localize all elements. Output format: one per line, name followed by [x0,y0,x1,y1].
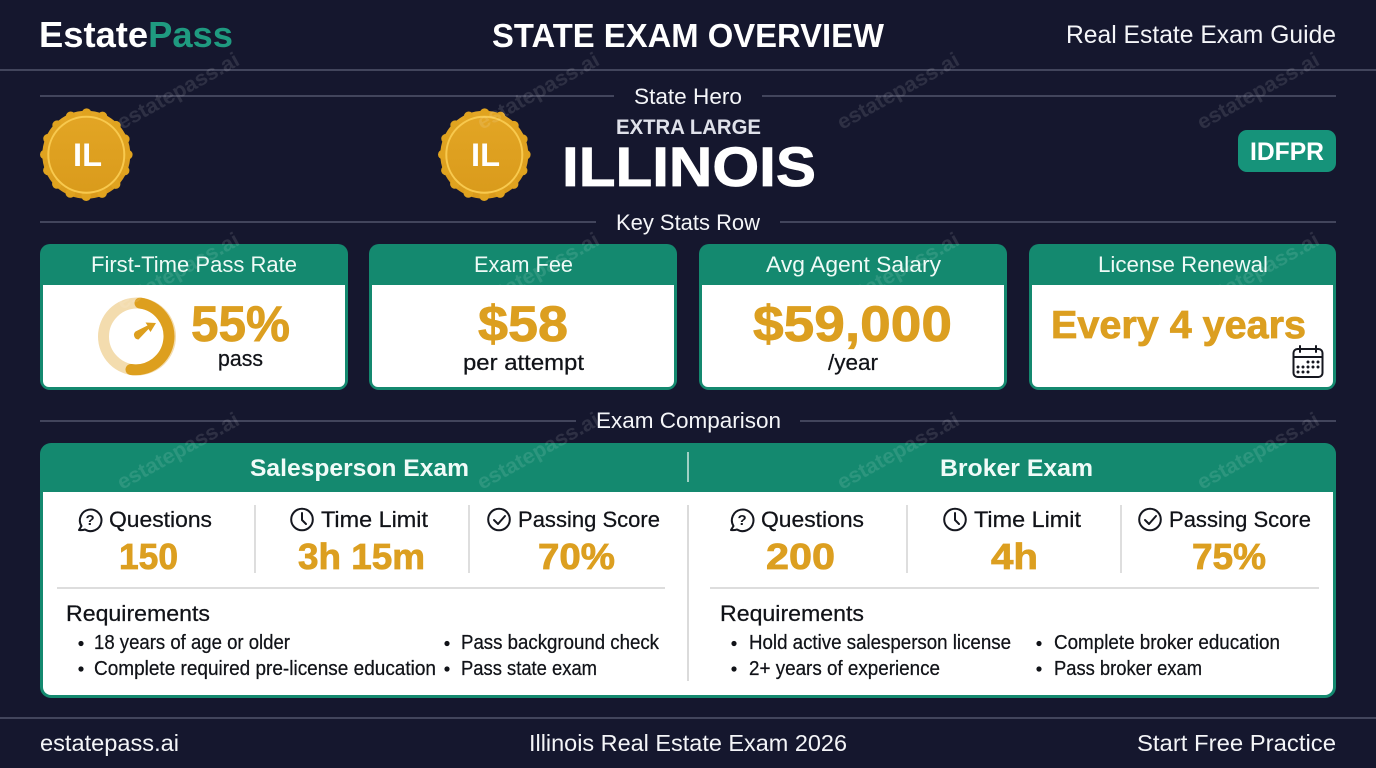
card: first-time pass rate [40,244,348,390]
section label: state hero: State Hero [634,84,742,109]
header tagline: Real Estate Exam Guide [1066,21,1336,49]
salesperson exam column: Salesperson Exam [250,455,469,482]
agency pill [1238,130,1336,172]
broker exam column [710,455,1319,680]
salesperson exam column: 70% [538,536,615,577]
watermarks: estatepass.ai [833,228,963,314]
agency pill: IDFPR [1250,138,1324,166]
state badge center: IL [471,137,500,173]
card: avg agent salary: Avg Agent Salary [766,252,941,277]
panel: exam comparison [40,443,1336,698]
salesperson exam column: Passing Score [518,507,660,532]
watermarks: estatepass.ai [473,48,603,134]
icon: question bubble: ? [738,512,747,529]
state badge left: IL [73,137,102,173]
title: STATE EXAM OVERVIEW [492,17,885,54]
watermarks: estatepass.ai [473,228,603,314]
broker exam column: Broker Exam [940,455,1093,482]
watermarks: estatepass.ai [113,408,243,494]
section label: exam comparison: Exam Comparison [596,408,781,433]
salesperson exam column: Questions [109,507,212,532]
icon: clock [944,509,966,530]
broker exam column: Requirements [720,601,864,626]
state badge left [42,111,130,199]
card: first-time pass rate: First-Time Pass Rate [91,252,297,277]
salesperson exam column: 3h 15m [298,536,425,577]
icon: question bubble [79,510,101,531]
state badge center [440,111,528,199]
size label: EXTRA LARGE [616,116,761,139]
card: license renewal: Every 4 years [1051,304,1306,347]
broker exam column: Questions [761,507,864,532]
footer: Illinois Real Estate Exam 2026 [529,730,847,756]
broker exam column: Time Limit [974,507,1081,532]
card: avg agent salary: /year [828,350,878,375]
section label: key stats: Key Stats Row [616,210,760,235]
broker exam column: 2+ years of experience [749,658,940,680]
card: avg agent salary: $59,000 [753,296,952,352]
broker exam column: 200 [766,536,835,577]
card: first-time pass rate: 55% [191,296,290,352]
broker exam column: 4h [991,536,1038,577]
footer [40,730,1336,756]
icon: check circle [488,509,510,530]
watermarks: estatepass.ai [833,48,963,134]
salesperson exam column [57,455,665,680]
state name: ILLINOIS [562,135,816,198]
watermarks: estatepass.ai [113,48,243,134]
logo: EstatePass [39,14,233,55]
salesperson exam column: 18 years of age or older [94,632,290,654]
card: exam fee [369,244,677,390]
icon: clock [291,509,313,530]
card: license renewal: License Renewal [1098,252,1268,277]
icon: check circle [1139,509,1161,530]
broker exam column: Passing Score [1169,507,1311,532]
icon: question bubble: ? [86,512,95,529]
salesperson exam column: Pass state exam [461,658,597,680]
salesperson exam column: Pass background check [461,632,660,654]
salesperson exam column: Requirements [66,601,210,626]
footer: Start Free Practice [1137,730,1336,756]
salesperson exam column: Time Limit [321,507,428,532]
card: exam fee: per attempt [463,350,584,375]
card: exam fee: $58 [478,296,568,352]
watermarks: estatepass.ai [473,408,603,494]
watermarks: estatepass.ai [113,228,243,314]
header bar [0,14,1376,70]
watermarks [113,48,1323,494]
icon: question bubble [731,510,753,531]
card: license renewal [1029,244,1336,390]
watermarks: estatepass.ai [1193,228,1323,314]
icon: calendar [1294,346,1322,377]
watermarks: estatepass.ai [833,408,963,494]
broker exam column: 75% [1192,536,1266,577]
card: first-time pass rate: pass [218,346,263,371]
broker exam column: Pass broker exam [1054,658,1202,680]
footer: estatepass.ai [40,730,179,756]
broker exam column: Hold active salesperson license [749,632,1011,654]
watermarks: estatepass.ai [1193,48,1323,134]
watermarks: estatepass.ai [1193,408,1323,494]
pass rate gauge [104,303,170,370]
salesperson exam column: Complete required pre-license education [94,658,436,680]
broker exam column: Complete broker education [1054,632,1280,654]
card: exam fee: Exam Fee [474,252,573,277]
salesperson exam column: 150 [119,536,178,577]
card: avg agent salary [699,244,1007,390]
